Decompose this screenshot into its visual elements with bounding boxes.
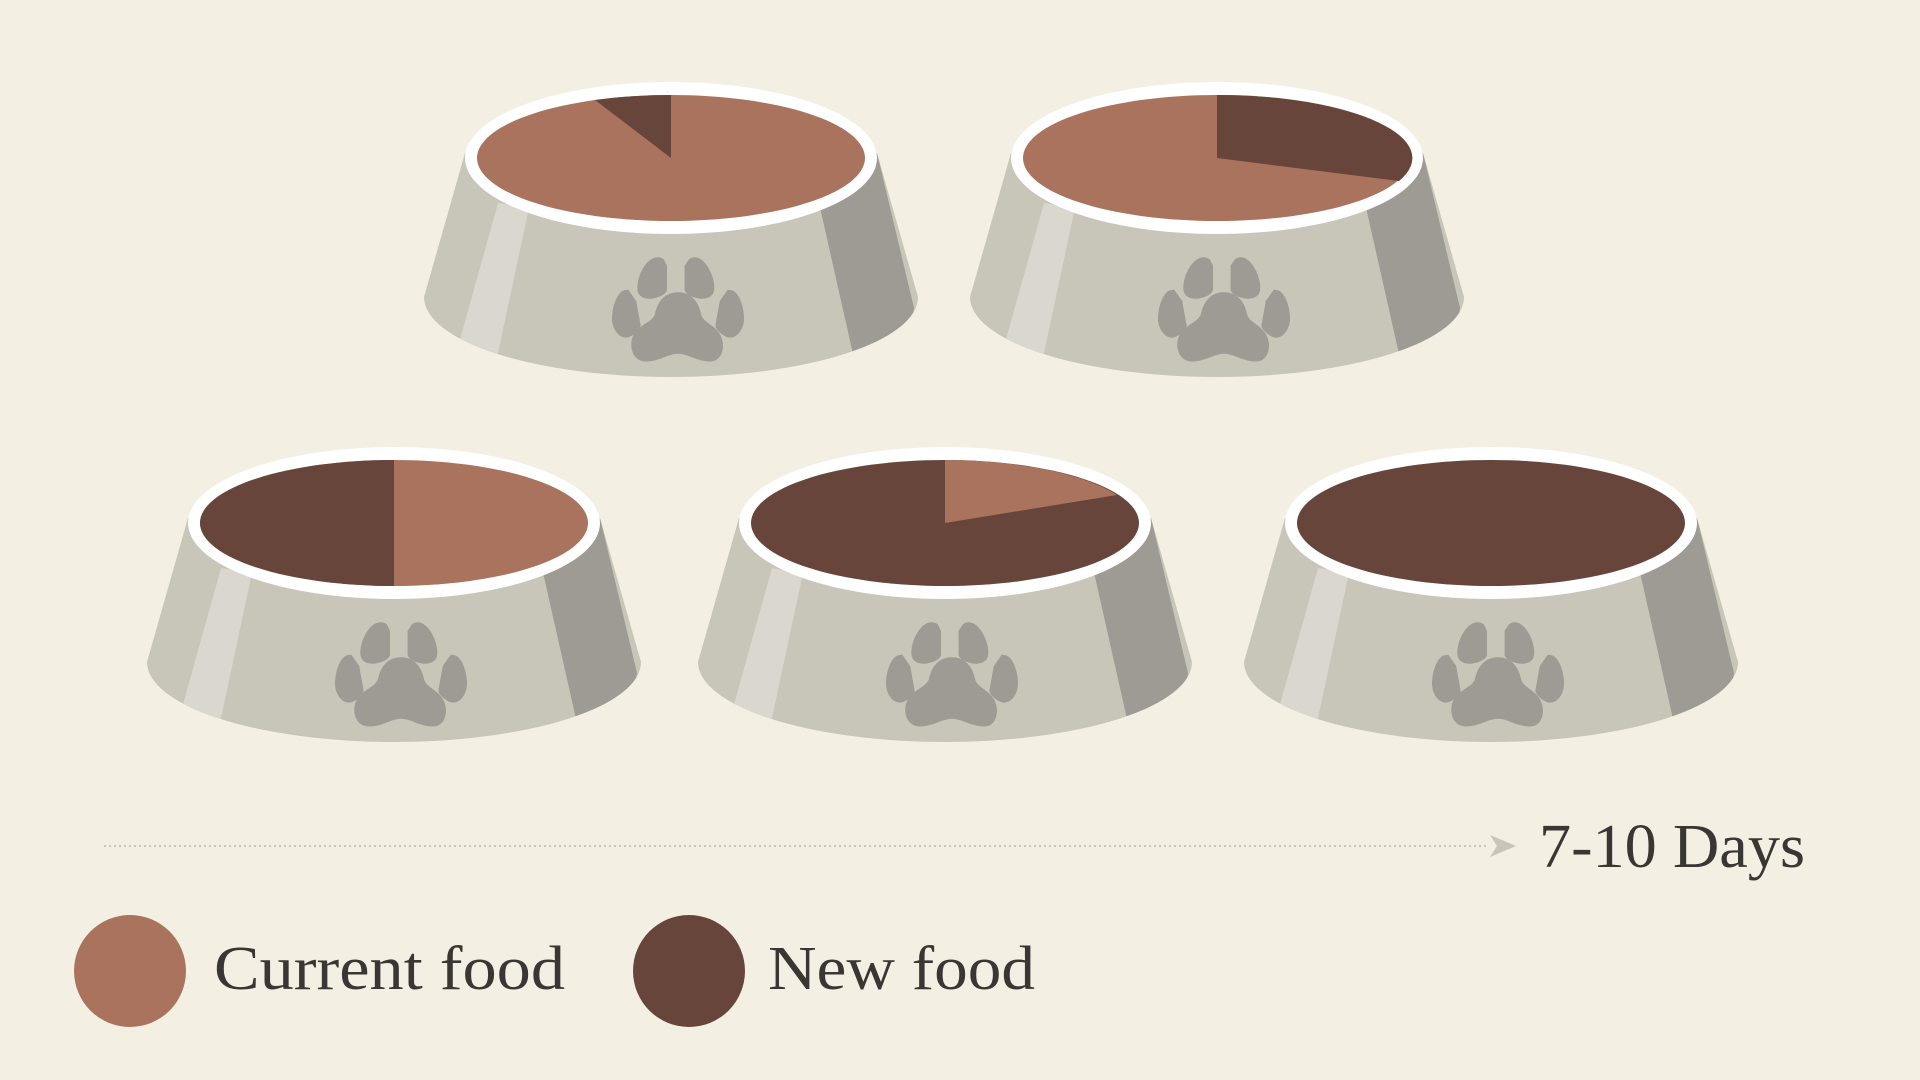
- food: current: [200, 460, 588, 586]
- food: new: [1297, 460, 1685, 586]
- legend: current food: [74, 915, 565, 1027]
- bowl 4: mostly new food: [698, 447, 1192, 742]
- slice: new food: [1217, 95, 1412, 181]
- slice: new food: [595, 95, 671, 158]
- slice: new food: [200, 460, 394, 586]
- icon: paw: [886, 622, 1018, 726]
- legend: current food: Current food: [214, 935, 565, 1003]
- icon: paw: [1432, 622, 1564, 726]
- bowl 5: all new food: [1244, 447, 1738, 742]
- icon: paw: [1158, 257, 1290, 362]
- food: current: [1023, 95, 1411, 221]
- legend: new food: New food: [768, 935, 1035, 1003]
- legend: new food: [633, 915, 1035, 1027]
- bowl 1: mostly current food: [424, 82, 918, 377]
- bowl 3: half and half: [147, 447, 641, 742]
- slice: current food: [945, 460, 1117, 523]
- icon: paw: [335, 622, 467, 726]
- icon: paw: [612, 257, 744, 362]
- timeline arrow: [104, 835, 1516, 857]
- bowl 2: 75/25: [970, 82, 1464, 377]
- timeline label: 7-10 Days: [1539, 813, 1805, 881]
- food: current: [477, 95, 865, 221]
- food: new: [751, 460, 1139, 586]
